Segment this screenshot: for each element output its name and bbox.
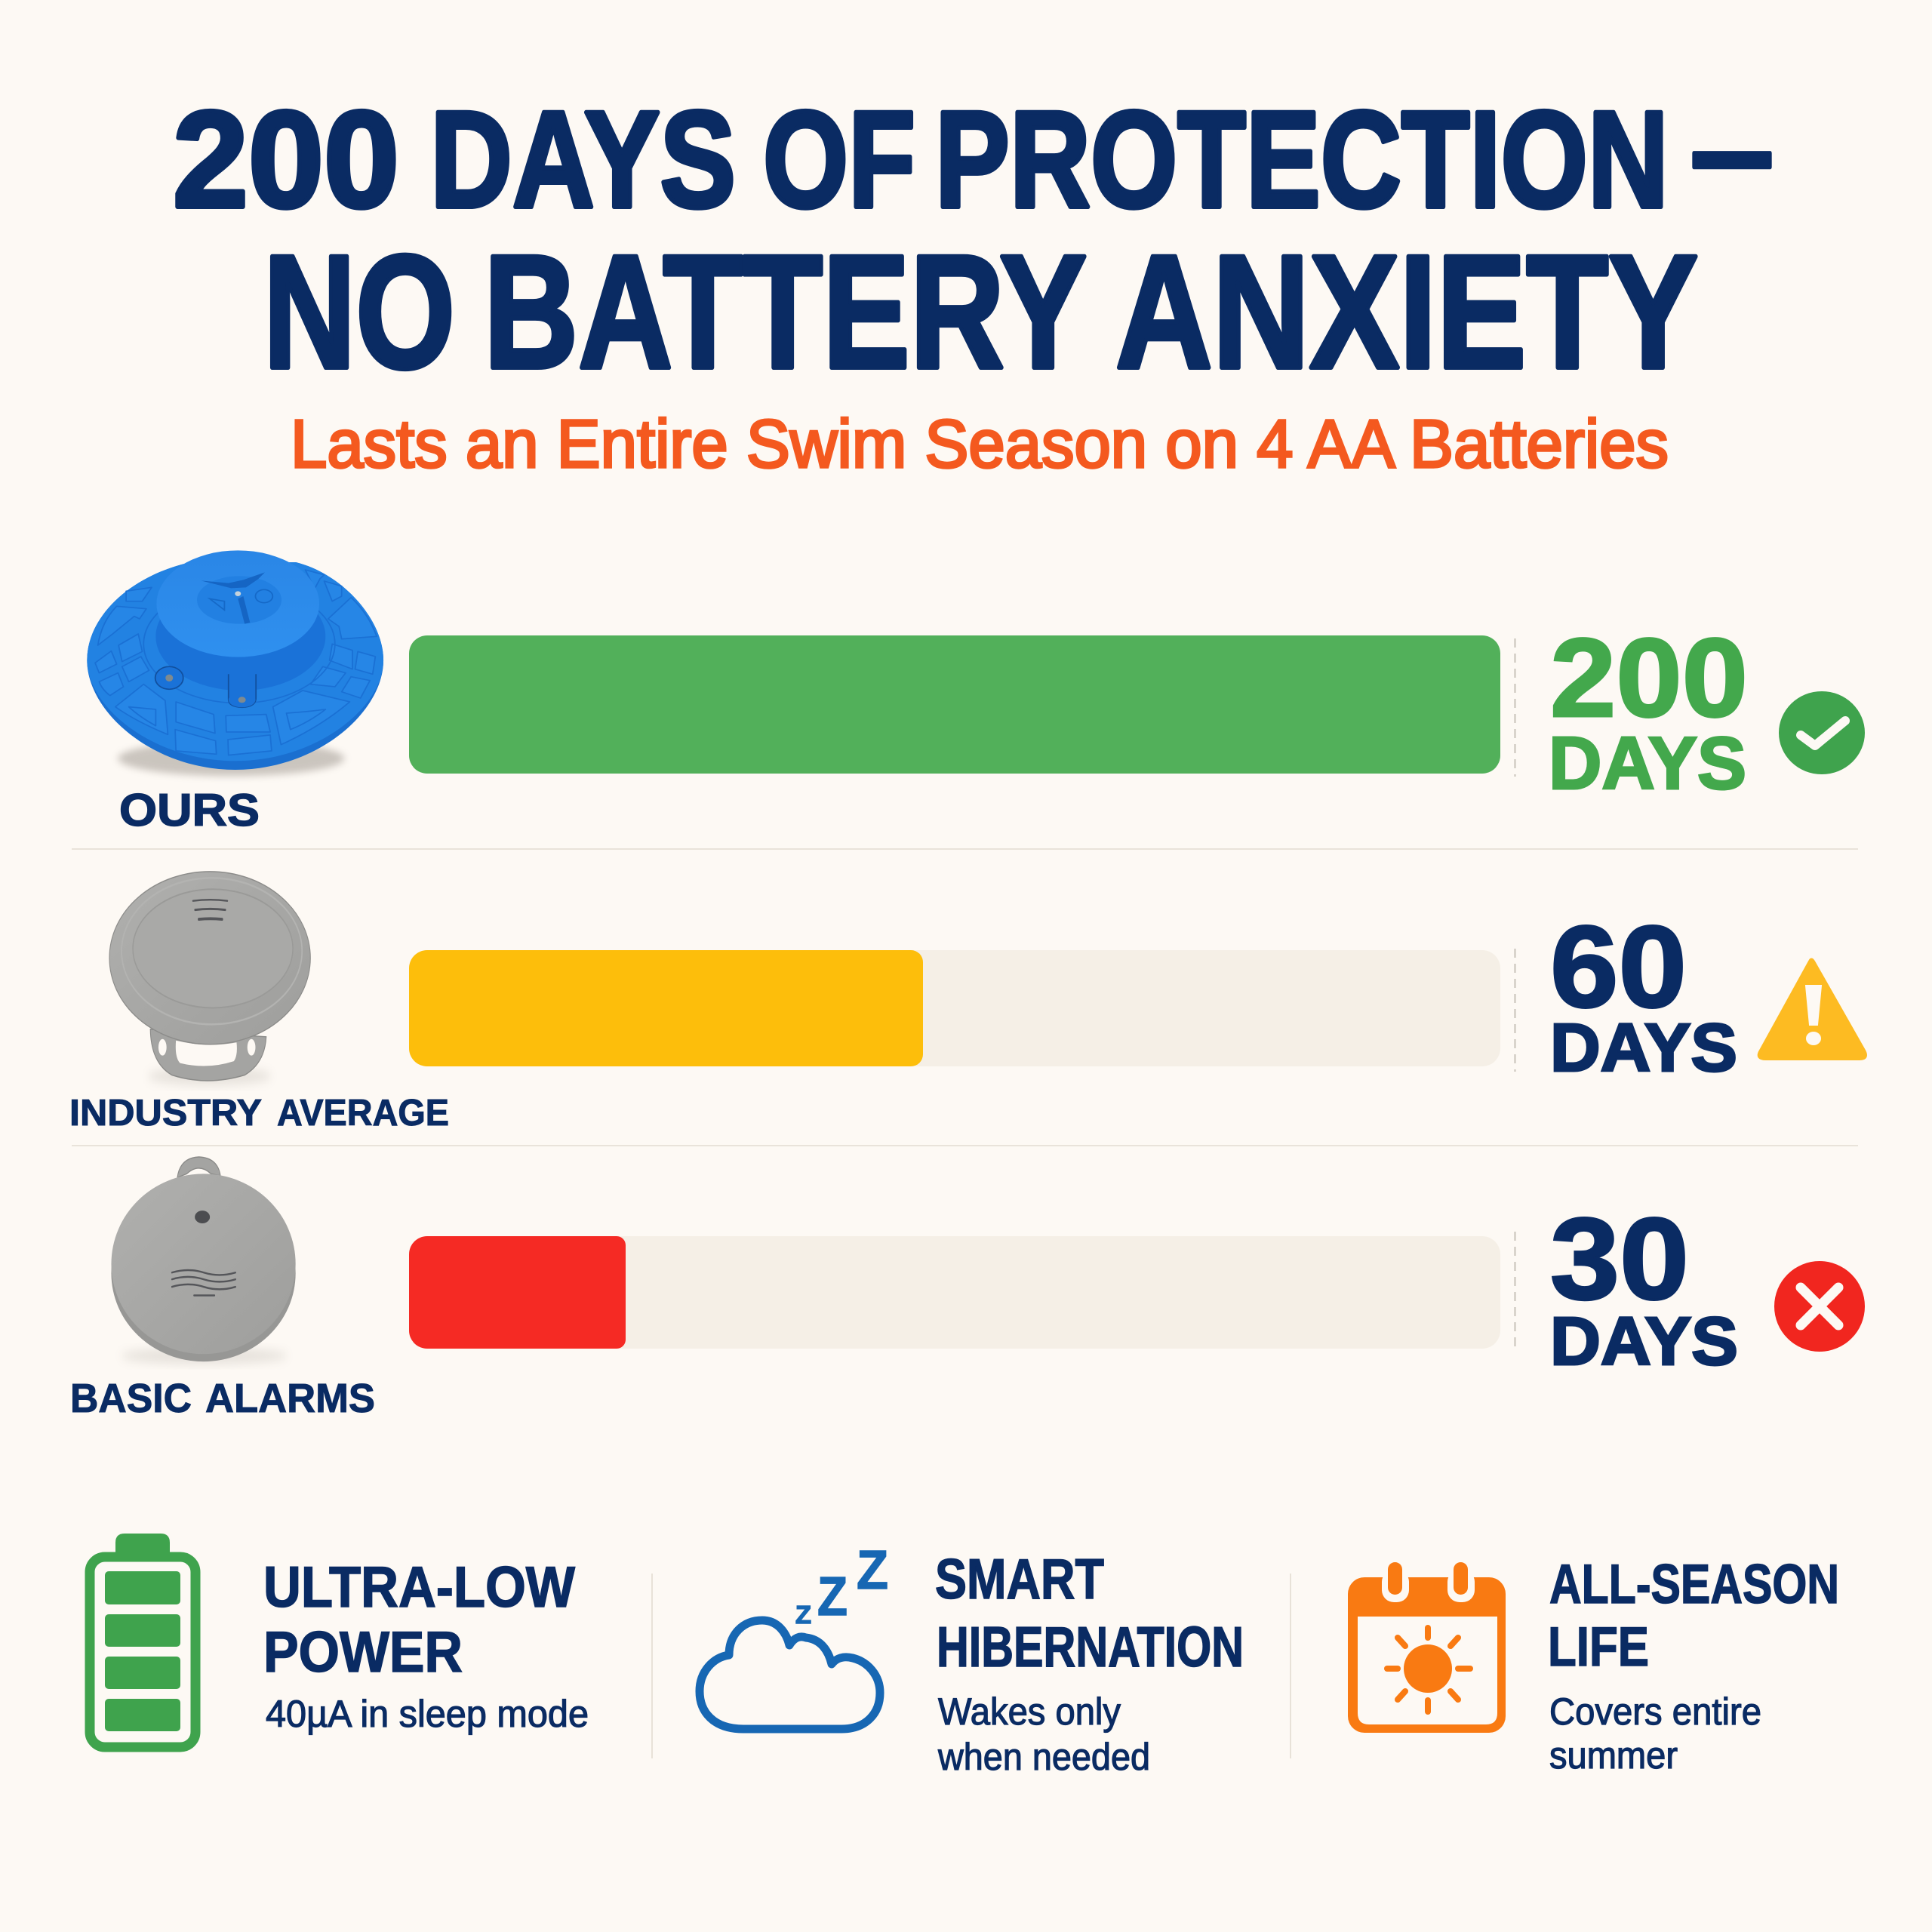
text: covers entire summer: Covers entire bbox=[1549, 1690, 1761, 1733]
title: 200 bbox=[173, 82, 399, 236]
text: covers entire summer bbox=[1549, 1690, 1761, 1777]
icon: grey round alarm with handle bbox=[109, 872, 310, 1085]
icon: check bbox=[1779, 691, 1865, 774]
heading: all-season life: ALL-SEASON bbox=[1549, 1554, 1839, 1615]
heading: smart hibernation bbox=[935, 1547, 1244, 1678]
heading: smart hibernation: HIBERNATION bbox=[937, 1615, 1244, 1678]
panel: ultra-low power bbox=[90, 1534, 589, 1747]
heading: ultra-low power: ULTRA-LOW bbox=[263, 1555, 575, 1620]
label: basic alarms: BASIC bbox=[70, 1376, 192, 1421]
icon: sleeping cloud bbox=[700, 1540, 888, 1729]
value: 200 days: 200 bbox=[1550, 616, 1748, 740]
icon: calendar with sun bbox=[1348, 1562, 1506, 1733]
label: industry average: INDUSTRY bbox=[69, 1093, 262, 1134]
title: ANXIETY bbox=[1115, 222, 1698, 402]
icon: blue alarm device bbox=[87, 550, 383, 776]
bar: 30 days bbox=[409, 1236, 1500, 1349]
icon: sleeping cloud: Z bbox=[857, 1540, 888, 1601]
heading: ultra-low power: POWER bbox=[263, 1620, 463, 1684]
heading: ultra-low power bbox=[263, 1555, 575, 1684]
value: 30 days bbox=[1550, 1194, 1738, 1380]
panel: ours row bbox=[87, 550, 1865, 835]
value: 30 days: 30 bbox=[1550, 1194, 1689, 1324]
title: BATTERY bbox=[484, 222, 1087, 402]
title: OF bbox=[763, 82, 915, 236]
text: wakes only when needed bbox=[937, 1690, 1150, 1778]
label: basic alarms: ALARMS bbox=[205, 1376, 375, 1421]
text: wakes only when needed: Wakes only bbox=[938, 1690, 1121, 1733]
icon: cross bbox=[1774, 1261, 1865, 1352]
text: wakes only when needed: when needed bbox=[937, 1736, 1150, 1778]
value: 60 days: 60 bbox=[1550, 902, 1687, 1032]
bar: 200 days bbox=[409, 635, 1500, 774]
icon: grey disc alarm bbox=[111, 1157, 296, 1364]
bar: 60 days bbox=[409, 950, 1500, 1066]
heading: all-season life bbox=[1548, 1554, 1839, 1678]
value: 60 days bbox=[1550, 902, 1737, 1086]
heading: all-season life: LIFE bbox=[1548, 1617, 1649, 1678]
icon: sleeping cloud: Z bbox=[795, 1601, 811, 1629]
title: PROTECTION bbox=[935, 82, 1669, 236]
panel: basic alarms row bbox=[70, 1157, 1865, 1421]
panel: smart hibernation bbox=[700, 1540, 1244, 1778]
heading: smart hibernation: SMART bbox=[935, 1547, 1104, 1611]
value: 200 days bbox=[1549, 616, 1748, 804]
text: sleep current: 40µA in sleep mode bbox=[266, 1693, 589, 1735]
value: 200 days: DAYS bbox=[1549, 721, 1746, 804]
text: covers entire summer: summer bbox=[1549, 1734, 1678, 1777]
label: ours: OURS bbox=[119, 785, 260, 835]
icon: sleeping cloud: Z bbox=[817, 1567, 848, 1627]
panel: industry average row bbox=[69, 872, 1866, 1134]
label: industry average bbox=[69, 1093, 449, 1134]
icon: battery bbox=[90, 1534, 195, 1747]
value: 30 days: DAYS bbox=[1550, 1304, 1738, 1380]
subtitle: Lasts an Entire Swim Season on 4 AA Batteries bbox=[291, 407, 1669, 482]
label: basic alarms bbox=[70, 1376, 375, 1421]
panel: all-season life bbox=[1348, 1554, 1839, 1777]
title: DAYS bbox=[430, 82, 736, 236]
title: — bbox=[1694, 72, 1770, 226]
label: industry average: AVERAGE bbox=[277, 1093, 449, 1134]
title bbox=[173, 72, 1770, 402]
title: NO bbox=[263, 222, 455, 402]
icon: warning bbox=[1759, 960, 1866, 1059]
value: 60 days: DAYS bbox=[1550, 1011, 1737, 1086]
